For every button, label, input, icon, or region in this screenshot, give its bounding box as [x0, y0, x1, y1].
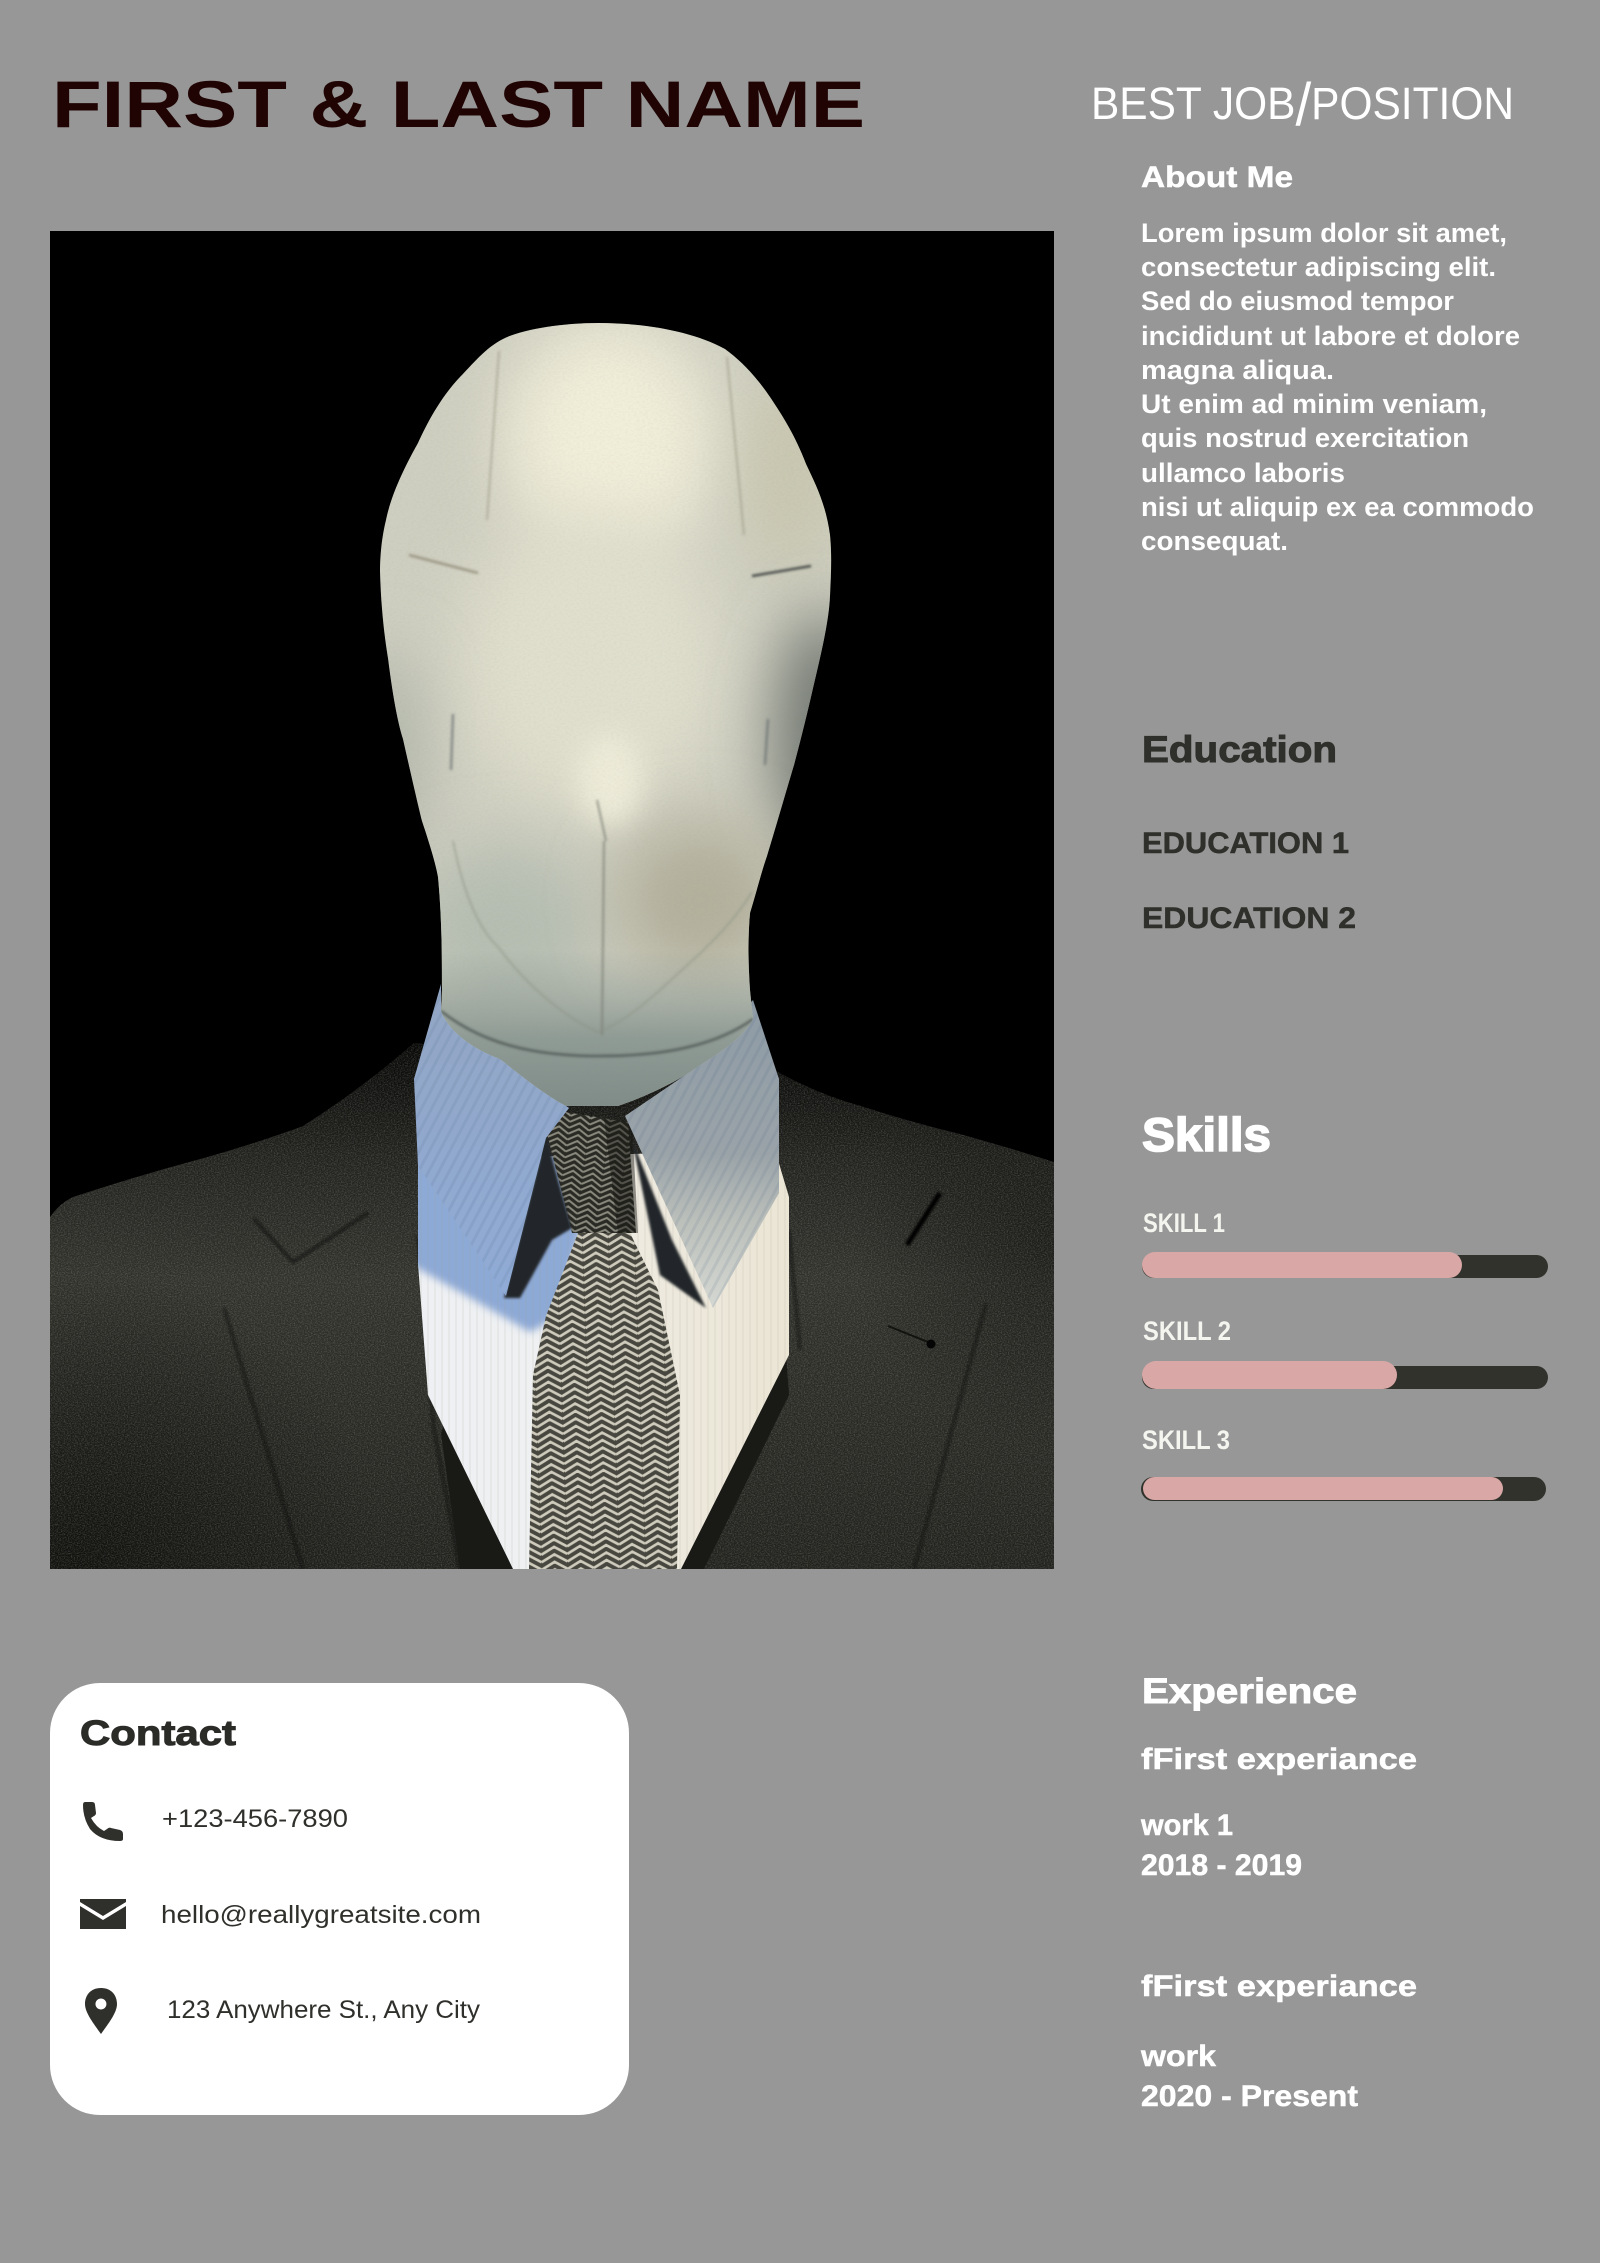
- experience section: [1140, 1672, 1417, 2113]
- about me heading: About Me: [1141, 161, 1293, 194]
- about me text: ullamco laboris: [1141, 458, 1345, 488]
- mannequin head: [380, 323, 832, 1106]
- email address: hello@reallygreatsite.com: [161, 1901, 481, 1929]
- icon: phone: [83, 1802, 123, 1841]
- experience entry 1: work 1: [1140, 1809, 1233, 1842]
- heading: job position: POSITION: [1311, 78, 1514, 129]
- experience entry 2: work: [1140, 2040, 1216, 2073]
- skill 3 bar: [1141, 1477, 1546, 1501]
- experience entry 1: fFirst experiance: [1141, 1743, 1417, 1776]
- heading: job position: [1091, 71, 1514, 138]
- about me text: consectetur adipiscing elit.: [1141, 252, 1496, 282]
- shirt: [410, 1140, 800, 1570]
- title: name: FIRST & LAST NAME: [52, 67, 865, 141]
- about me text: nisi ut aliquip ex ea commodo: [1141, 492, 1534, 522]
- about me text: Sed do eiusmod tempor: [1141, 286, 1454, 316]
- icon: location pin: [85, 1988, 117, 2034]
- skill 3 label: SKILL 3: [1142, 1425, 1230, 1455]
- skill 1 bar: [1142, 1252, 1548, 1278]
- experience heading: Experience: [1142, 1672, 1357, 1711]
- necktie: [529, 1233, 680, 1569]
- about me text: incididunt ut labore et dolore: [1141, 321, 1520, 351]
- skill 2 bar: [1142, 1361, 1548, 1389]
- experience entry 1: 2018 - 2019: [1141, 1849, 1302, 1882]
- experience entry 2: fFirst experiance: [1141, 1970, 1417, 2003]
- skills section: [1141, 1108, 1548, 1501]
- contact heading: Contact: [80, 1714, 236, 1753]
- skill 1 label: SKILL 1: [1143, 1208, 1225, 1238]
- experience entry 1: [1140, 1743, 1417, 1882]
- suit jacket: [50, 1040, 1054, 1570]
- left collar: [414, 984, 569, 1296]
- icon: envelope: [80, 1899, 126, 1929]
- phone number: +123-456-7890: [162, 1805, 348, 1833]
- about me text: magna aliqua.: [1141, 355, 1334, 385]
- experience entry 2: [1140, 1970, 1417, 2113]
- right collar: [625, 1000, 779, 1308]
- about me text: Ut enim ad minim veniam,: [1141, 389, 1487, 419]
- about me text: quis nostrud exercitation: [1141, 423, 1469, 453]
- skills heading: Skills: [1142, 1108, 1271, 1161]
- about me text: [1141, 218, 1534, 556]
- street address: 123 Anywhere St., Any City: [167, 1996, 481, 2024]
- education item 2: EDUCATION 2: [1142, 902, 1356, 935]
- education heading: Education: [1142, 729, 1337, 770]
- seams: [409, 351, 811, 1056]
- portrait photo illustration: [50, 231, 1054, 1570]
- experience entry 2: 2020 - Present: [1141, 2080, 1358, 2113]
- about me text: consequat.: [1141, 526, 1288, 556]
- education item 1: EDUCATION 1: [1142, 827, 1349, 860]
- about me text: Lorem ipsum dolor sit amet,: [1141, 218, 1507, 248]
- heading: job position: /: [1295, 71, 1311, 138]
- education section: [1142, 729, 1356, 935]
- panel: contact card: [50, 1683, 629, 2115]
- skill 2 label: SKILL 2: [1143, 1316, 1231, 1346]
- heading: job position: BEST JOB: [1091, 78, 1308, 129]
- collar shadow: [504, 1135, 706, 1308]
